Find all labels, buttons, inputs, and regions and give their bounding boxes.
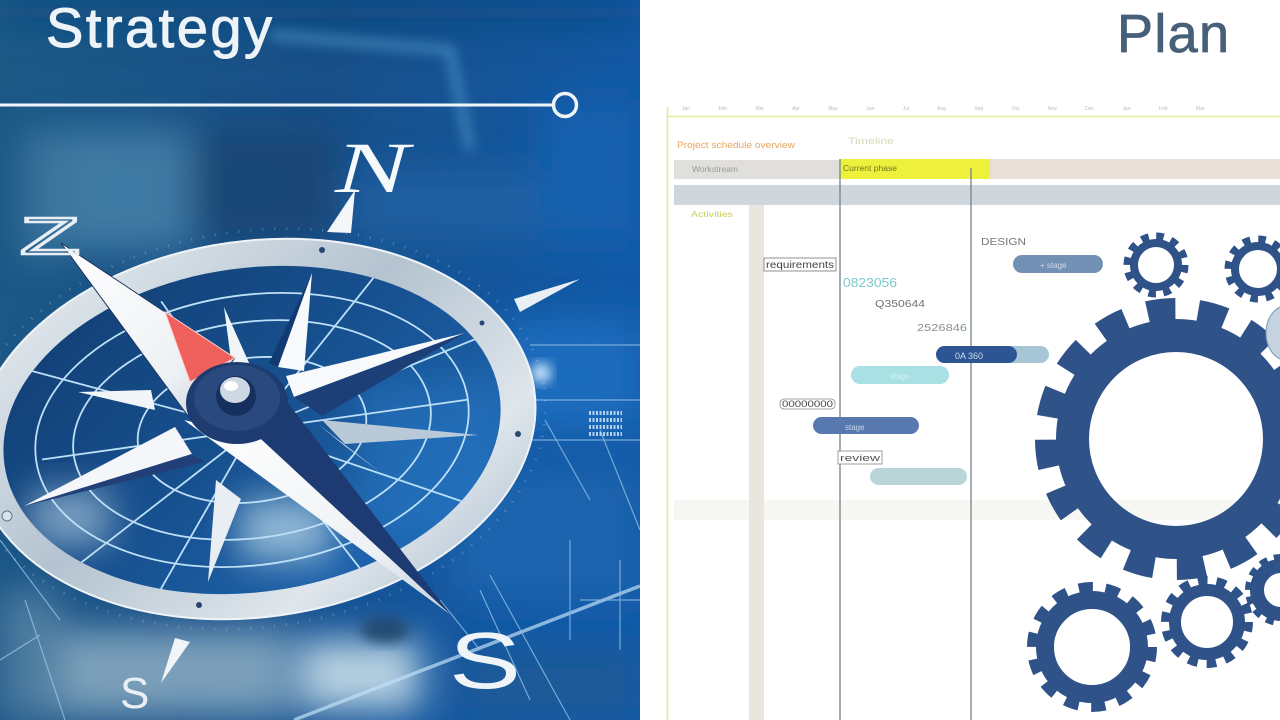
gantt chart [667, 106, 1280, 720]
blueprint lines [0, 345, 640, 720]
gantt title: Project schedule overview [677, 140, 796, 150]
needle: north-west [61, 243, 235, 416]
compass letter: south: S [449, 616, 521, 705]
rose: east lower point [318, 420, 478, 472]
gear: large [1027, 290, 1280, 588]
timeline rule with end node [0, 94, 576, 116]
gantt task: label 3: Q350644 [875, 299, 926, 310]
gear: top left [1128, 236, 1184, 294]
compass marker: east triangle [514, 279, 580, 312]
heading: plan: Plan [1117, 4, 1229, 64]
rose: east point [286, 333, 465, 416]
gantt header band [674, 159, 1280, 179]
gantt task: bar 1 [1013, 255, 1103, 273]
compass marker: north triangle [327, 190, 355, 233]
compass [0, 227, 547, 631]
gear: bottom right [1248, 557, 1280, 623]
gantt task: bar 1: + stage [1040, 261, 1067, 270]
gear: bottom left [1033, 588, 1151, 706]
ring screws [2, 247, 521, 608]
gantt task: bar 4: stage [845, 423, 865, 432]
needle: red tip [165, 312, 235, 382]
compass letter: north: N [333, 128, 415, 208]
compass letter: bottom: S [120, 669, 149, 718]
gantt task: bar 3: stage [890, 372, 910, 381]
gantt task: label 4: 2526846 [917, 323, 968, 334]
gantt task: teal code: 0823056 [843, 275, 897, 290]
gantt label column [749, 205, 764, 720]
gantt shaded row [674, 500, 1280, 520]
rose: north point [269, 273, 312, 371]
ring shadow haze [361, 617, 409, 643]
dial rose: small north-west point [224, 307, 250, 368]
gantt milestone lines [840, 159, 971, 720]
dial rose: small west point [78, 390, 155, 410]
hub [186, 362, 288, 444]
tiny grid glyph [589, 413, 622, 434]
gantt month scale: Jan Feb Mar Apr May Jun Jul Aug Sep Oct Nov Dec Jan Feb Mar [682, 106, 1205, 112]
gantt task: label 6 [838, 451, 882, 464]
gear: bottom middle [1166, 580, 1248, 664]
gantt frame [667, 107, 1280, 720]
light glow [531, 363, 551, 383]
compass ring [0, 238, 536, 620]
panel: strategy [0, 0, 640, 720]
gantt task: label 6: review [840, 453, 881, 463]
gantt task: bar 2: 0A 360 [955, 351, 983, 361]
compass dial [3, 266, 501, 594]
gantt subtitle: Timeline [848, 136, 894, 146]
panel: plan [640, 0, 1280, 720]
ring ticks [0, 227, 547, 631]
gantt sub-header band [674, 185, 1280, 205]
gantt task: bar 5 [870, 468, 967, 485]
gantt task: label 1: requirements [766, 260, 834, 271]
gantt task: bar 4 [813, 417, 919, 434]
gear: partial right [1266, 306, 1280, 360]
blurred blueprint band [270, 35, 470, 150]
rose: west point [24, 427, 205, 506]
needle: south-east [184, 403, 451, 615]
gantt task: label 5: 00000000 [782, 399, 833, 409]
gantt task: bar 2 [936, 346, 1049, 363]
compass letter: needle tip: Z [20, 208, 80, 266]
dial rose: south point [208, 480, 241, 582]
gantt header band: Current phase [843, 164, 898, 173]
gantt task: bar 3 [851, 366, 949, 384]
gantt column label: Activities [691, 210, 733, 219]
gantt header band: Workstream [692, 165, 738, 174]
gantt task: label 1 [764, 258, 836, 271]
gantt task: label 2: DESIGN [981, 237, 1026, 248]
gear: top right [1228, 240, 1280, 298]
compass marker: south triangle [161, 638, 190, 683]
gears [1027, 236, 1280, 706]
